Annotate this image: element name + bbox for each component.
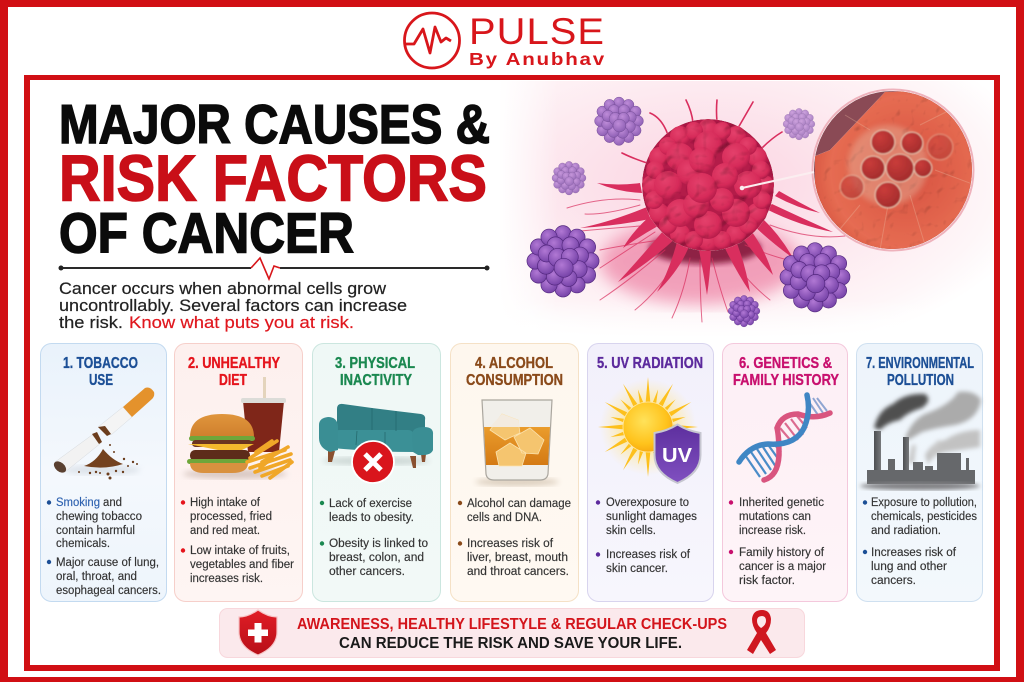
callout line 1: AWARENESS, HEALTHY LIFESTYLE & REGULAR CHECK-UPS (297, 616, 727, 633)
body text (729, 497, 826, 587)
body text: Lack of exercise (329, 498, 412, 510)
virus 4 (527, 226, 599, 297)
body text: Family history of (739, 547, 825, 559)
body text: Increases risk of (467, 538, 554, 550)
icon: factory with smoke (860, 392, 981, 490)
cup lid (241, 398, 286, 403)
icon: whisky glass (475, 400, 559, 486)
cell tendrils (580, 183, 833, 295)
middle rungs (780, 415, 808, 442)
body text: Major cause of lung, (56, 557, 159, 569)
intro paragraph (59, 279, 407, 332)
cell shadow (649, 232, 761, 264)
panel: 3 physical inactivity (312, 344, 440, 602)
heading: FAMILY HISTORY (733, 372, 839, 389)
buildings (867, 453, 975, 484)
lettuce 2 (187, 459, 249, 464)
soda cup (243, 401, 284, 452)
body text: Exposure to pollution, (871, 497, 977, 509)
virus 6 (728, 295, 760, 327)
smoke (874, 392, 981, 465)
heading: 7. ENVIRONMENTAL (866, 355, 974, 372)
blue strand (739, 395, 808, 462)
cross badge (352, 441, 394, 483)
icon: burger, soda and fries (183, 377, 292, 479)
logo tagline: By Anubhav (469, 49, 606, 69)
heading (733, 355, 839, 389)
icon: medical shield (239, 610, 277, 655)
body text: and radiation. (871, 525, 941, 537)
body text: Overexposure to (606, 497, 689, 509)
logo (404, 11, 606, 69)
sun glow (600, 379, 696, 475)
virus 2 (783, 108, 815, 140)
body text: increases risk. (190, 573, 263, 585)
shield (654, 424, 700, 483)
body text: vegetables and fiber (190, 559, 294, 571)
hero pink background (500, 81, 993, 337)
body text: Increases risk of (606, 549, 691, 561)
body text (863, 497, 977, 587)
body text: liver, breast, mouth (467, 552, 568, 564)
heading: DIET (219, 372, 247, 389)
body text: chemicals, pesticides (871, 511, 977, 523)
panel: 5 uv radiation (588, 344, 714, 602)
intro paragraph: uncontrollably. Several factors can increase (59, 296, 407, 315)
bun bottom (190, 463, 248, 473)
body text: cancers. (871, 575, 916, 587)
body text: chemicals. (56, 538, 110, 550)
body text: esophageal cancers. (56, 585, 161, 597)
intro paragraph: Know what puts you at risk. (129, 313, 354, 332)
body text: skin cancer. (606, 563, 668, 575)
heading: 1. TOBACCO (63, 355, 138, 372)
upper rungs (809, 398, 827, 415)
heading: USE (89, 372, 113, 389)
hero illustration (498, 81, 994, 338)
body text: other cancers. (329, 566, 405, 578)
body text (596, 497, 697, 575)
title line 1: MAJOR CAUSES & (59, 93, 490, 155)
heading: 2. UNHEALTHY (188, 355, 280, 372)
body text: and red meat. (190, 525, 260, 537)
intro paragraph: the risk. (59, 313, 123, 332)
body text (181, 497, 294, 585)
body text: Inherited genetic (739, 497, 824, 509)
panel: 6 genetics and family history (722, 344, 848, 602)
body text: leads to obesity. (329, 512, 414, 524)
patty 2 (190, 450, 250, 461)
body text: skin cells. (606, 525, 656, 537)
icon: cigarette (52, 388, 154, 480)
body text (458, 498, 571, 578)
body text: risk factor. (739, 575, 795, 587)
body text: and throat cancers. (467, 566, 569, 578)
heading (335, 355, 415, 389)
logo word PULSE: PULSE (469, 11, 605, 52)
intro paragraph: Cancer occurs when abnormal cells grow (59, 279, 387, 298)
inset contents (814, 91, 972, 249)
bun top (190, 414, 254, 437)
icon: dna helix (739, 395, 830, 480)
body text: Increases risk of (871, 547, 957, 559)
callout line 2: CAN REDUCE THE RISK AND SAVE YOUR LIFE. (339, 635, 682, 652)
panel: 4 alcohol consumption (450, 344, 578, 602)
cancer cell body (642, 119, 774, 251)
heading: POLLUTION (887, 372, 954, 389)
body text: lung and other (871, 561, 947, 573)
pink strand (764, 413, 830, 480)
sun rays (598, 377, 698, 477)
icon: pulse circle (404, 13, 460, 68)
lower rungs (745, 445, 781, 477)
pointer line (740, 172, 814, 190)
magnified inset (812, 88, 980, 255)
body text: High intake of (190, 497, 261, 509)
body text (47, 497, 161, 597)
straw (263, 377, 266, 401)
virus 3 (552, 161, 586, 195)
body text: Alcohol can damage (467, 498, 571, 510)
icon: sun with uv shield (598, 377, 700, 483)
panel: 2 unhealthy diet (174, 344, 302, 602)
body text: increase risk. (739, 525, 806, 537)
icon: sofa with cross (319, 404, 433, 483)
body text: Smoking (56, 497, 100, 509)
hero left fade (498, 81, 558, 337)
heading (466, 355, 563, 389)
body text: chewing tobacco (56, 511, 142, 523)
inset ring (812, 90, 974, 250)
patty (192, 440, 252, 447)
panel: 1 tobacco use (40, 344, 166, 602)
panel: 7 environmental pollution (856, 344, 982, 602)
shield label: UV (662, 445, 693, 467)
pink spread under the cell (600, 220, 800, 304)
lettuce (189, 436, 255, 441)
body text (320, 498, 428, 578)
body text: mutations can (739, 511, 811, 523)
heading (188, 355, 280, 389)
body text: Low intake of fruits, (190, 545, 290, 557)
body text: oral, throat, and (56, 571, 137, 583)
body text: processed, fried (190, 511, 272, 523)
fine filaments (567, 100, 845, 322)
virus 1 (595, 97, 643, 145)
title line 3: OF CANCER (59, 202, 354, 266)
heading: CONSUMPTION (466, 372, 563, 389)
body text: Obesity is linked to (329, 538, 428, 550)
body text: contain harmful (56, 525, 135, 537)
heading: 6. GENETICS & (739, 355, 832, 372)
body text: cancer is a major (739, 561, 826, 573)
heading (866, 355, 974, 389)
cheese (188, 444, 254, 457)
body text: and (103, 497, 122, 509)
sun disc (623, 402, 673, 452)
body text: cells and DNA. (467, 512, 542, 524)
virus 5 (780, 243, 850, 312)
title line 2: RISK FACTORS (59, 142, 487, 214)
heading: 4. ALCOHOL (475, 355, 553, 372)
body text: sunlight damages (606, 511, 697, 523)
heading: 5. UV RADIATION (597, 355, 703, 372)
heading: INACTIVITY (340, 372, 412, 389)
chimneys (874, 431, 909, 476)
body text: breast, colon, and (329, 552, 424, 564)
fries (247, 441, 292, 478)
hero bottom fade (498, 300, 994, 338)
virus particles (527, 97, 850, 327)
ground haze (860, 482, 980, 490)
icon: awareness ribbon (747, 610, 776, 654)
heading (63, 355, 138, 389)
title (59, 93, 490, 266)
callout banner (220, 608, 804, 658)
divider with pulse (58, 258, 490, 279)
heading: 3. PHYSICAL (335, 355, 415, 372)
